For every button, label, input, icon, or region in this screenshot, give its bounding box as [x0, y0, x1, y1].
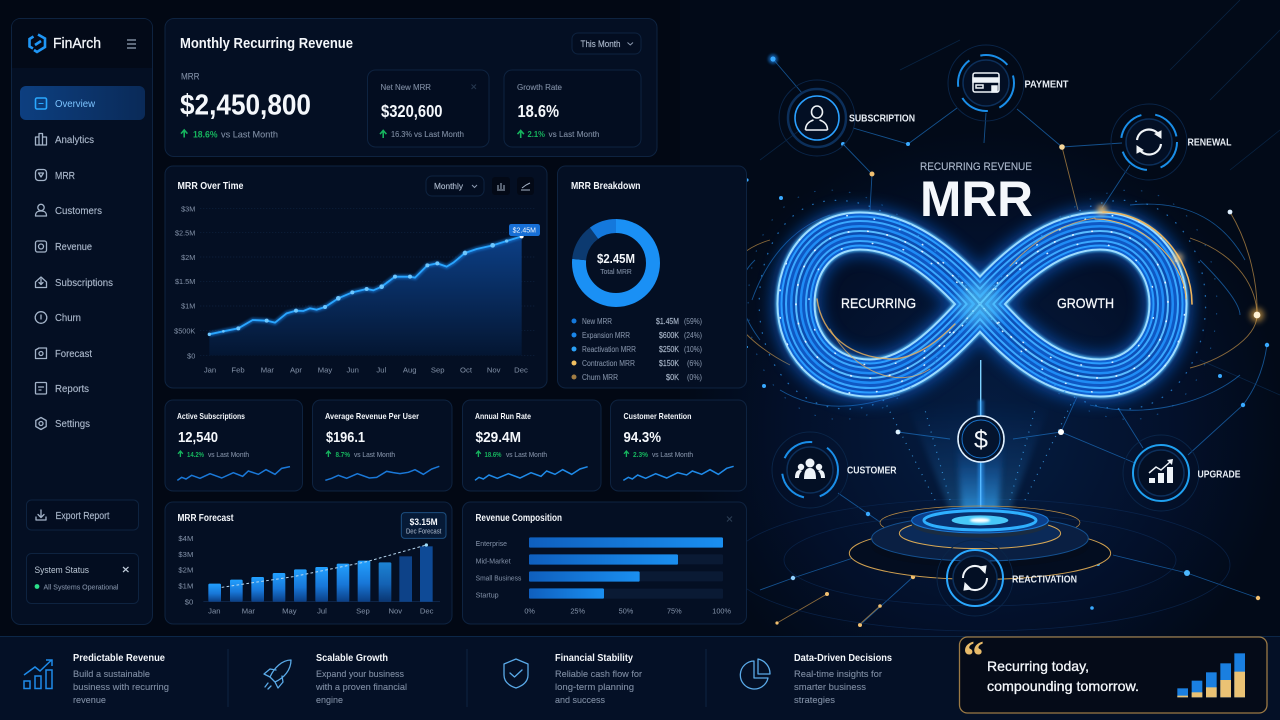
legend: Reactivation MRR — [582, 345, 636, 354]
node: customer — [772, 432, 848, 508]
legend: $600K — [659, 331, 680, 340]
benefit: predictable revenue: Predictable Revenue — [73, 653, 165, 664]
callout: dec forecast: $3.15M — [410, 517, 438, 527]
x axis labels: Dec — [420, 606, 434, 615]
node: renewal — [1111, 104, 1187, 180]
nav active: overview — [20, 86, 145, 120]
donut chart: Total MRR — [600, 267, 632, 276]
legend — [572, 317, 702, 382]
nav: mrr: MRR — [55, 170, 75, 182]
callout: dec forecast — [401, 513, 446, 538]
node: upgrade — [1123, 435, 1199, 511]
button: export report — [26, 500, 138, 530]
percentage axis: 25% — [570, 606, 585, 615]
forecast trend line — [222, 545, 426, 587]
benefit: predictable revenue: revenue — [73, 695, 106, 706]
donut chart — [579, 226, 653, 300]
icon: people — [795, 458, 825, 479]
panel: mrr forecast — [165, 502, 452, 624]
heading: MRR Breakdown — [571, 180, 640, 192]
panel: mrr over time — [165, 166, 547, 388]
heading: Monthly Recurring Revenue — [180, 36, 353, 52]
icon: card — [973, 73, 999, 92]
benefit: financial stability — [504, 653, 642, 706]
legend: (0%) — [687, 373, 702, 382]
benefit: data-driven decisions — [740, 653, 892, 706]
category labels: Enterprise — [476, 539, 507, 548]
legend: Churn MRR — [582, 373, 618, 382]
benefit: data-driven decisions: Data-Driven Decisions — [794, 653, 892, 664]
node: reactivation — [937, 540, 1013, 616]
y axis labels: $2M — [181, 253, 195, 262]
x axis labels: Nov — [389, 606, 402, 615]
x axis labels: Sep — [356, 606, 370, 615]
icon: growth bars — [24, 660, 52, 688]
system status: All Systems Operational — [44, 582, 119, 592]
nav: analytics — [36, 134, 94, 146]
card: active subscriptions: vs Last Month — [208, 450, 249, 459]
node: dollar — [958, 416, 1004, 462]
card: active subscriptions: Active Subscriptions — [177, 411, 245, 421]
nav: churn — [35, 312, 81, 324]
x axis labels: Sep — [431, 366, 444, 375]
x axis labels: Apr — [290, 366, 302, 375]
percentage axis: 50% — [619, 606, 634, 615]
callout: quote: compounding tomorrow. — [987, 678, 1139, 694]
percentage axis: 75% — [667, 606, 682, 615]
icon: refresh arrows — [963, 566, 987, 590]
sparkline — [177, 467, 290, 480]
legend: (10%) — [684, 345, 702, 354]
card: annual run rate: vs Last Month — [506, 450, 547, 459]
icon: rocket — [264, 660, 291, 689]
primary metric: mrr: MRR — [181, 72, 200, 82]
benefit: scalable growth: Scalable Growth — [316, 653, 388, 664]
benefit: scalable growth: Expand your business — [316, 669, 404, 680]
label: payment: PAYMENT — [1024, 80, 1068, 90]
card: active subscriptions: 14.2% — [187, 450, 204, 459]
line glow — [209, 236, 522, 334]
quote mark: “ — [963, 634, 984, 680]
y axis labels: $0 — [185, 597, 193, 606]
heading: MRR Over Time — [178, 180, 244, 192]
sparkline — [623, 466, 734, 480]
primary metric: mrr: $2,450,800 — [180, 90, 311, 122]
light beam — [885, 360, 1072, 515]
legend: Expansion MRR — [582, 331, 630, 340]
x axis labels: Mar — [242, 606, 255, 615]
mini stacked bars — [1177, 653, 1245, 697]
benefit: data-driven decisions: strategies — [794, 695, 835, 706]
nav: customers: Customers — [55, 205, 102, 217]
card: active subscriptions — [165, 400, 302, 491]
benefit: scalable growth — [264, 653, 407, 706]
y axis labels: $4M — [178, 534, 193, 543]
legend: $250K — [659, 345, 680, 354]
card: annual run rate — [462, 400, 601, 491]
card: average revenue per user — [312, 400, 452, 491]
x axis labels: Oct — [460, 366, 473, 375]
holographic platform — [849, 506, 1111, 579]
benefit: financial stability: Reliable cash flow for — [555, 669, 642, 680]
card: growth rate: Growth Rate — [517, 82, 562, 92]
card: net new mrr: vs Last Month — [414, 129, 464, 139]
network art backdrop — [680, 0, 1280, 640]
callout: latest value: $2.45M — [513, 226, 536, 235]
hero: network lines and nodes — [704, 0, 1280, 631]
legend: $0K — [666, 373, 680, 382]
gold highlight strands — [817, 212, 1192, 378]
card: customer retention: 94.3% — [624, 429, 661, 446]
benefit: predictable revenue — [24, 653, 169, 706]
card: customer retention: vs Last Month — [652, 450, 693, 459]
benefit: predictable revenue: Build a sustainable — [73, 669, 150, 680]
dropdown: this month — [572, 33, 641, 54]
brand name: FinArch — [53, 35, 101, 52]
callout: latest value — [509, 224, 540, 236]
y axis labels: $1.5M — [175, 277, 195, 286]
primary metric: mrr: vs Last Month — [221, 130, 278, 140]
heading: Revenue Composition — [476, 513, 562, 524]
x axis labels: Jan — [208, 606, 221, 615]
footer band — [0, 636, 1280, 720]
main MRR title: MRR — [920, 171, 1033, 227]
nav: forecast — [36, 348, 92, 360]
y axis labels: $1M — [181, 302, 195, 311]
card: active subscriptions: 12,540 — [178, 429, 218, 446]
subtitle: RECURRING REVENUE — [920, 161, 1032, 173]
dropdown: this month: This Month — [580, 39, 620, 49]
system status — [26, 554, 138, 604]
card: growth rate: 18.6% — [518, 101, 559, 121]
legend: $150K — [659, 359, 680, 368]
label: customer: CUSTOMER — [847, 466, 897, 476]
callout: quote — [960, 634, 1267, 713]
percentage axis: 100% — [712, 606, 732, 615]
nav: revenue: Revenue — [55, 241, 92, 253]
card: customer retention — [610, 400, 746, 491]
legend: New MRR — [582, 317, 612, 326]
card: average revenue per user: 8.7% — [336, 450, 350, 459]
benefit: financial stability: and success — [555, 695, 605, 706]
system status: System Status — [34, 565, 89, 576]
x axis labels: Feb — [231, 366, 245, 375]
x axis labels: May — [282, 606, 297, 615]
card: annual run rate: 18.6% — [484, 450, 502, 459]
callout: dec forecast: Dec Forecast — [406, 529, 441, 536]
x axis labels — [204, 366, 528, 375]
sparkline — [325, 466, 439, 480]
label: renewal: RENEWAL — [1188, 138, 1232, 148]
data points — [208, 234, 524, 336]
icon: renew arrows — [1137, 129, 1161, 155]
card: customer retention: Customer Retention — [624, 411, 692, 421]
label: reactivation: REACTIVATION — [1012, 574, 1077, 586]
panel: revenue composition — [462, 502, 746, 624]
y axis labels: $0 — [187, 351, 195, 360]
x axis labels: Dec — [514, 366, 528, 375]
hero: infinity loop — [748, 190, 1217, 419]
icon: shield — [504, 659, 528, 688]
loop label: growth: GROWTH — [1057, 295, 1114, 311]
sparkline — [475, 467, 588, 480]
y axis labels: $2.5M — [175, 228, 195, 237]
card: average revenue per user: $196.1 — [326, 429, 365, 446]
y axis labels — [174, 204, 195, 360]
nav: reports: Reports — [55, 383, 89, 395]
category labels: Mid-Market — [476, 556, 511, 565]
node: payment — [948, 45, 1024, 121]
network nodes — [704, 54, 1269, 627]
icon: growth chart — [1149, 459, 1173, 483]
card: annual run rate: Annual Run Rate — [475, 411, 531, 421]
category labels: Small Business — [476, 573, 521, 582]
benefit: financial stability: Financial Stability — [555, 653, 633, 664]
card: average revenue per user: vs Last Month — [354, 450, 395, 459]
legend: Contraction MRR — [582, 359, 635, 368]
nav: forecast: Forecast — [55, 348, 92, 360]
area fill — [209, 236, 522, 355]
dropdown: monthly — [426, 176, 484, 196]
icon: collapse — [727, 516, 732, 522]
x axis labels: Mar — [261, 366, 274, 375]
x axis labels: Jan — [204, 366, 216, 375]
y axis labels: $500K — [174, 326, 195, 335]
percentage axis — [524, 606, 732, 615]
donut chart: $2.45M — [597, 252, 635, 266]
card: growth rate: vs Last Month — [548, 129, 600, 139]
icon: logo mark — [30, 34, 45, 52]
legend: (6%) — [687, 359, 702, 368]
nav: settings: Settings — [55, 418, 90, 430]
y axis labels — [178, 534, 193, 606]
chart toggle icons — [492, 177, 534, 195]
icon: person — [806, 106, 828, 130]
benefit: scalable growth: with a proven financial — [315, 682, 407, 693]
nav: customers — [36, 204, 102, 217]
benefit: financial stability: long-term planning — [555, 682, 634, 693]
node: subscription — [779, 80, 855, 156]
nav: analytics: Analytics — [55, 134, 94, 146]
nav: revenue — [36, 241, 92, 253]
legend: (24%) — [684, 331, 702, 340]
benefit: scalable growth: engine — [316, 695, 343, 706]
card: annual run rate: $29.4M — [476, 429, 521, 446]
card: growth rate: 2.1% — [528, 129, 545, 139]
quote text: Recurring today, — [987, 658, 1089, 674]
nav active: overview: Overview — [55, 98, 95, 110]
panel: mrr breakdown — [558, 166, 746, 388]
y axis labels: $3M — [181, 204, 195, 213]
panel: monthly recurring revenue — [165, 18, 657, 156]
nav: settings — [36, 418, 90, 430]
nav: reports — [36, 382, 89, 395]
x axis labels: Jul — [376, 366, 387, 375]
card: average revenue per user: Average Revenue Per User — [325, 411, 420, 421]
y axis labels: $2M — [178, 566, 193, 575]
x axis labels: Jun — [346, 366, 359, 375]
category labels: Startup — [476, 591, 499, 600]
card: net new mrr — [368, 70, 489, 147]
nav: subscriptions: Subscriptions — [55, 277, 113, 289]
panel: sidebar — [12, 18, 152, 624]
nav: mrr — [36, 170, 75, 182]
icon: pie chart — [740, 659, 770, 689]
x axis labels: Aug — [403, 366, 416, 375]
label: subscription: SUBSCRIPTION — [849, 114, 915, 124]
label: upgrade: UPGRADE — [1198, 470, 1241, 480]
icon: menu — [127, 40, 136, 48]
bar chart — [178, 513, 446, 615]
lower circuit rings — [730, 499, 1230, 631]
benefit: data-driven decisions: Real-time insights for — [794, 669, 882, 680]
benefit: predictable revenue: business with recurring — [73, 682, 169, 693]
card: net new mrr: $320,600 — [381, 101, 443, 121]
line chart — [174, 204, 540, 375]
card: customer retention: 2.3% — [633, 450, 648, 459]
benefit: data-driven decisions: smarter business — [794, 682, 866, 693]
line — [209, 236, 522, 334]
hero: heading — [920, 161, 1033, 227]
legend: (59%) — [684, 317, 702, 326]
dropdown: monthly: Monthly — [434, 181, 464, 191]
category labels — [476, 539, 521, 600]
y axis labels: $3M — [178, 550, 193, 559]
legend: $1.45M — [656, 317, 679, 326]
y axis labels: $1M — [178, 582, 193, 591]
card: net new mrr: 16.3% — [391, 129, 412, 139]
card: net new mrr: Net New MRR — [380, 82, 431, 92]
logo — [30, 34, 101, 52]
x axis labels: Jul — [317, 606, 327, 615]
card: growth rate — [504, 70, 641, 147]
icon: dollar sign: $ — [974, 426, 988, 454]
heading: MRR Forecast — [178, 513, 234, 524]
horizontal bars — [476, 537, 732, 615]
button: export report: Export Report — [56, 511, 110, 522]
primary metric: mrr: 18.6% — [193, 130, 218, 140]
x axis labels: May — [318, 366, 332, 375]
nav: churn: Churn — [55, 312, 81, 324]
x axis labels: Nov — [487, 366, 501, 375]
primary metric: mrr — [180, 72, 311, 140]
loop label: recurring: RECURRING — [841, 295, 916, 311]
x axis labels — [208, 606, 434, 615]
percentage axis: 0% — [524, 606, 535, 615]
